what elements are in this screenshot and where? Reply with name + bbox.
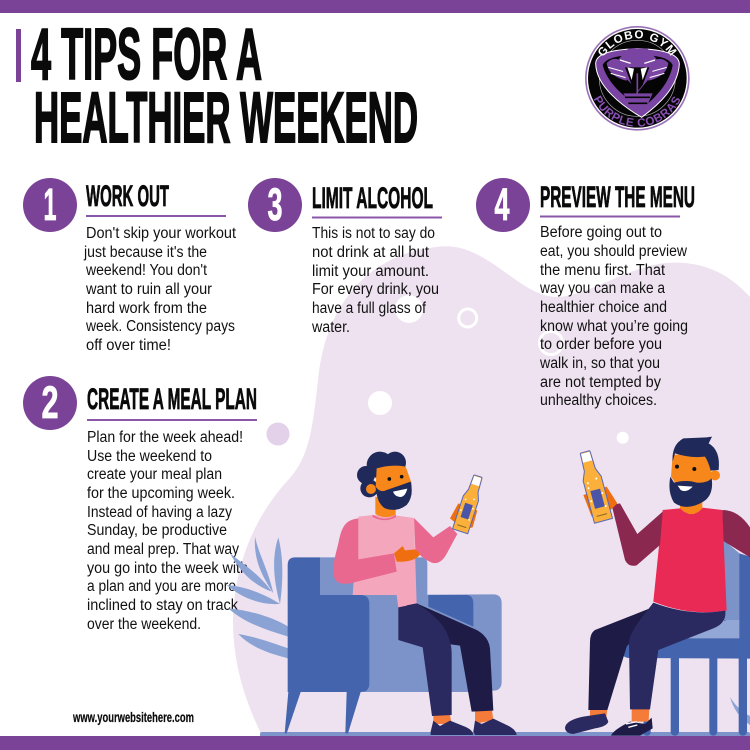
number badge 4: 4 [494, 179, 510, 230]
torso [353, 515, 417, 608]
body text tip 4: know what you’re going [540, 318, 688, 335]
body text tip 1: just because it's the [83, 244, 207, 261]
body text tip 4: healthier choice and [540, 299, 667, 316]
body text tip 4: eat, you should preview [540, 243, 688, 260]
number badge 1 [23, 178, 77, 232]
body text tip 2: you go into the week with [87, 560, 248, 577]
body text tip 4: unhealthy choices. [540, 392, 657, 409]
heading: limit alcohol: LIMIT ALCOHOL [312, 182, 433, 215]
body text tip 3: water. [311, 319, 350, 336]
body text tip 1: want to ruin all your [85, 281, 212, 298]
body text tip 3: For every drink, you [312, 281, 439, 298]
title: 4 TIPS FOR A [31, 15, 262, 95]
body text tip 4 [539, 224, 688, 409]
hand [583, 487, 617, 517]
body text tip 2: over the weekend. [87, 616, 201, 633]
body text tip 3 [311, 225, 439, 336]
body text tip 2: Plan for the week ahead! [87, 429, 243, 446]
body text tip 2 [87, 429, 248, 633]
underline [86, 215, 226, 217]
body text tip 3: This is not to say do [312, 225, 435, 242]
head [669, 437, 720, 507]
lavender background blob [233, 246, 750, 736]
head [357, 452, 412, 510]
sleeves [333, 518, 397, 584]
panel: tip 4 preview the menu [476, 178, 695, 409]
legs [565, 603, 725, 736]
chair [619, 540, 750, 736]
body text tip 4: way you can make a [539, 280, 665, 297]
bottle [576, 449, 612, 523]
body text tip 2: inclined to stay on track [87, 597, 238, 614]
body text tip 2: Use the weekend to [87, 448, 212, 465]
body text tip 1: week. Consistency pays [85, 318, 235, 335]
body text tip 3: have a full glass of [312, 300, 427, 317]
logo: Globo Gym Purple Cobras: PURPLE COBRAS [594, 95, 680, 127]
icon: small plant right [730, 697, 750, 725]
panel: tip 2 create a meal plan [23, 376, 257, 633]
body text tip 1: Don't skip your workout [86, 225, 237, 242]
title [16, 15, 418, 158]
body text tip 1: weekend! You don't [85, 262, 208, 279]
body text tip 2: a plan and you are more [87, 578, 236, 595]
logo: Globo Gym Purple Cobras [585, 26, 690, 131]
bottle [453, 474, 486, 534]
neck [680, 500, 702, 514]
sofa [285, 557, 502, 733]
body text tip 2: and meal prep. That way [87, 541, 239, 558]
right arm behind [722, 510, 750, 557]
body text tip 4: Before going out to [540, 224, 662, 241]
body text tip 1: off over time! [86, 337, 171, 354]
body text tip 2: create your meal plan [87, 466, 222, 483]
body text tip 4: to order before you [540, 336, 662, 353]
logo: Globo Gym Purple Cobras: GLOBO GYM [598, 30, 677, 56]
underline [312, 216, 442, 218]
hands [394, 546, 420, 562]
collar [373, 515, 396, 520]
number badge 3 [248, 178, 302, 232]
underline [540, 216, 680, 218]
number badge 1: 1 [44, 179, 56, 230]
body text tip 2: Instead of having a lazy [87, 504, 232, 521]
illustration: man on chair [565, 437, 750, 736]
decorative bubbles [266, 295, 629, 446]
number badge 3: 3 [268, 179, 282, 230]
neck [375, 497, 396, 517]
panel: tip 3 limit alcohol [248, 178, 442, 336]
illustration: man on sofa [285, 452, 517, 735]
number badge 2 [23, 376, 77, 430]
torso [653, 508, 727, 612]
body text tip 3: limit your amount. [312, 263, 429, 280]
number badge 2: 2 [42, 377, 58, 428]
body text tip 4: the menu first. That [540, 262, 666, 279]
bottom bar [0, 736, 750, 750]
underline [87, 419, 257, 421]
body text tip 2: Sunday, be productive [87, 522, 227, 539]
body text tip 2: for the upcoming week. [87, 485, 235, 502]
body text tip 4: walk in, so that you [539, 355, 660, 372]
raised arm [612, 503, 663, 566]
body text tip 3: not drink at all but [312, 244, 430, 261]
heading: create a meal plan: CREATE A MEAL PLAN [87, 383, 257, 416]
body text tip 4: are not tempted by [540, 374, 661, 391]
heading: work out: WORK OUT [86, 180, 169, 213]
number badge 4 [476, 178, 530, 232]
panel: tip 1 work out [23, 178, 237, 354]
floor strip [260, 732, 750, 737]
legs [398, 603, 517, 735]
top bar [0, 0, 750, 13]
body text tip 1: hard work from the [86, 300, 207, 317]
icon: plant left [227, 537, 288, 658]
body text tip 1 [83, 225, 237, 354]
website url: www.yourwebsitehere.com [72, 710, 194, 725]
